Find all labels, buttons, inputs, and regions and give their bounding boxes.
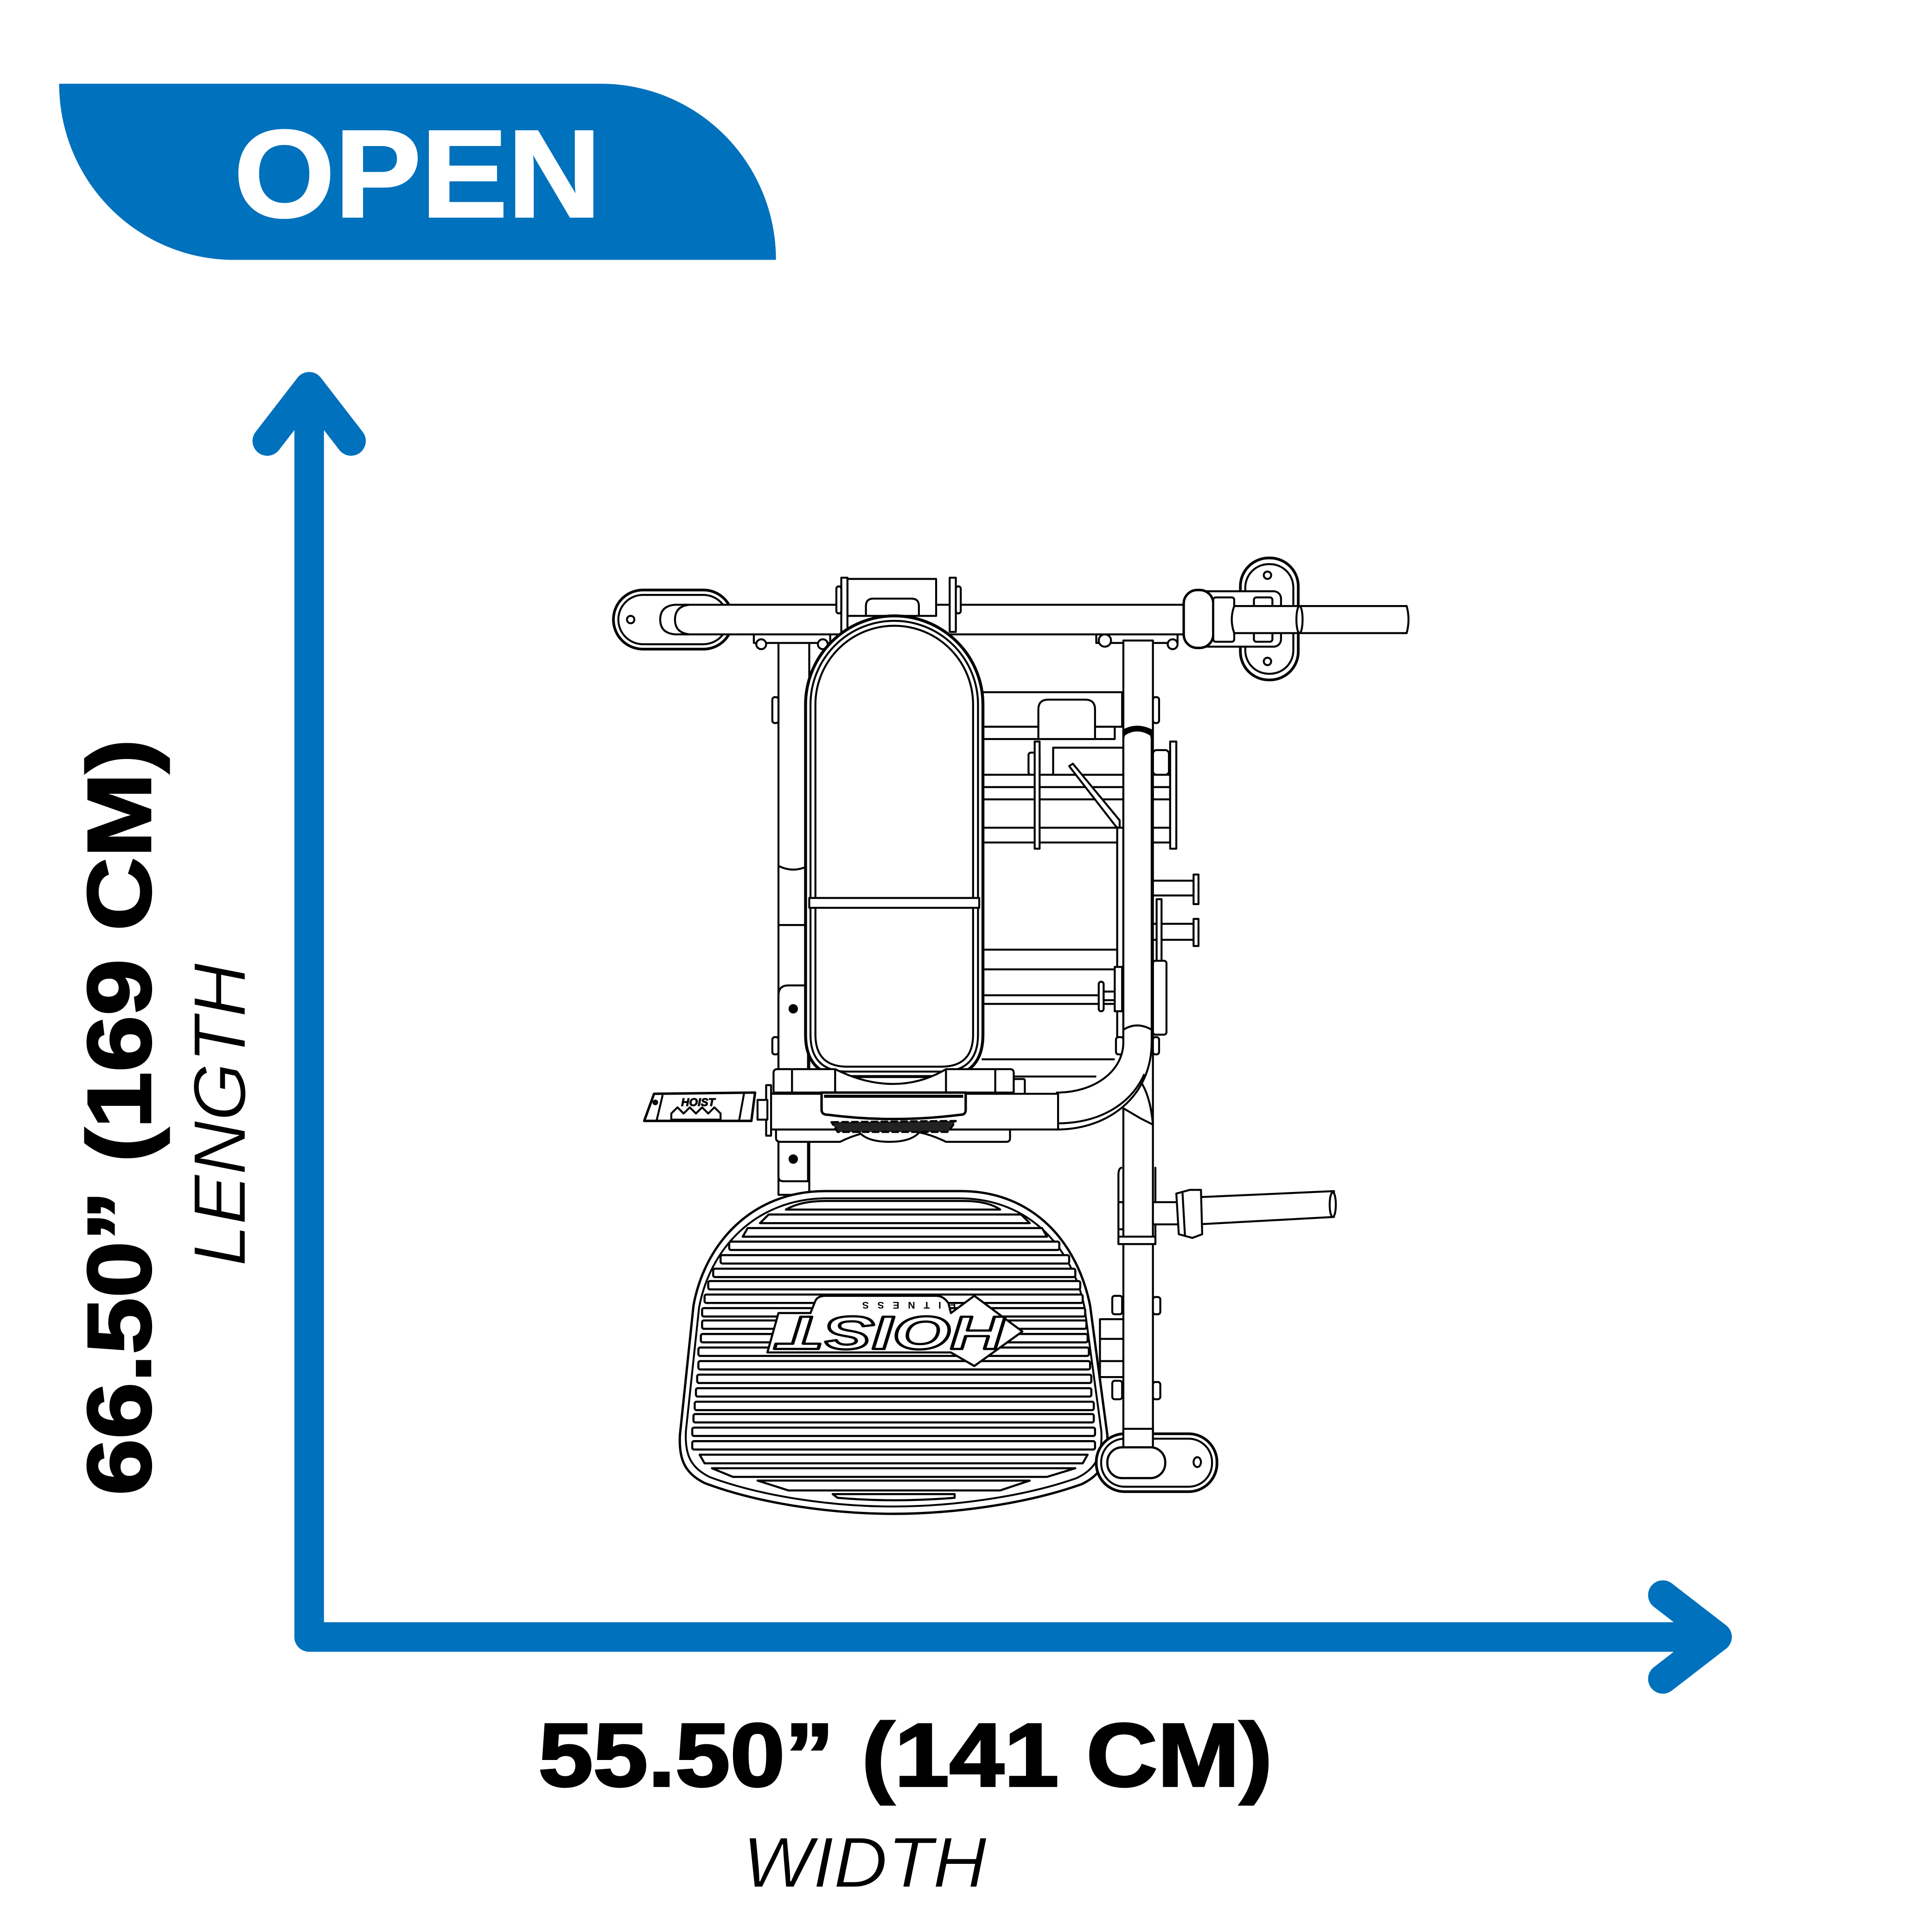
banner: OPEN xyxy=(59,84,776,260)
top cross tube xyxy=(660,605,1185,634)
seat strap xyxy=(822,1092,966,1119)
arrow: width axis xyxy=(309,1595,1717,1679)
banner: OPEN: OPEN xyxy=(234,104,601,243)
small HOIST logo xyxy=(831,1121,956,1132)
left frame post xyxy=(772,638,809,1195)
HOIST FITNESS logo on foot plate: FITNESS xyxy=(862,1300,956,1311)
lower bracket xyxy=(776,1129,1010,1142)
machine line drawing xyxy=(613,558,1409,1514)
right rear structure and tubes xyxy=(982,692,1199,1077)
left pedal grip xyxy=(644,1092,767,1121)
lower right foot plate xyxy=(1096,1429,1217,1492)
label: LENGTH: LENGTH xyxy=(179,963,261,1266)
top pivot block xyxy=(836,578,961,632)
foot plate ribs xyxy=(692,1201,1095,1500)
right rear plate xyxy=(1193,558,1298,680)
peg: right side weight horn xyxy=(1153,1190,1336,1238)
label: length dimension: 66.50” (169 CM) xyxy=(69,739,170,1495)
label: width dimension: 55.50” (141 CM) xyxy=(538,1705,1272,1805)
arrow: length axis xyxy=(267,387,351,1637)
front cross tube xyxy=(770,1094,1058,1129)
left end collar xyxy=(766,1085,771,1135)
upper seat bracket xyxy=(773,1069,1025,1094)
front handle tube curve xyxy=(1057,727,1152,1129)
seat pad xyxy=(805,616,983,1077)
top mount plates and bolts xyxy=(754,633,1178,649)
HOIST FITNESS logo on foot plate xyxy=(767,1296,1022,1366)
right frame post xyxy=(1100,640,1160,1448)
HOIST FITNESS logo on foot plate: HOIST xyxy=(774,1307,1007,1358)
foot plate xyxy=(680,1191,1108,1514)
label: WIDTH: WIDTH xyxy=(743,1823,987,1902)
left pedal grip: HOIST xyxy=(681,1097,716,1109)
left foot plate xyxy=(613,590,733,649)
right collar and peg on cross tube xyxy=(1184,590,1409,648)
